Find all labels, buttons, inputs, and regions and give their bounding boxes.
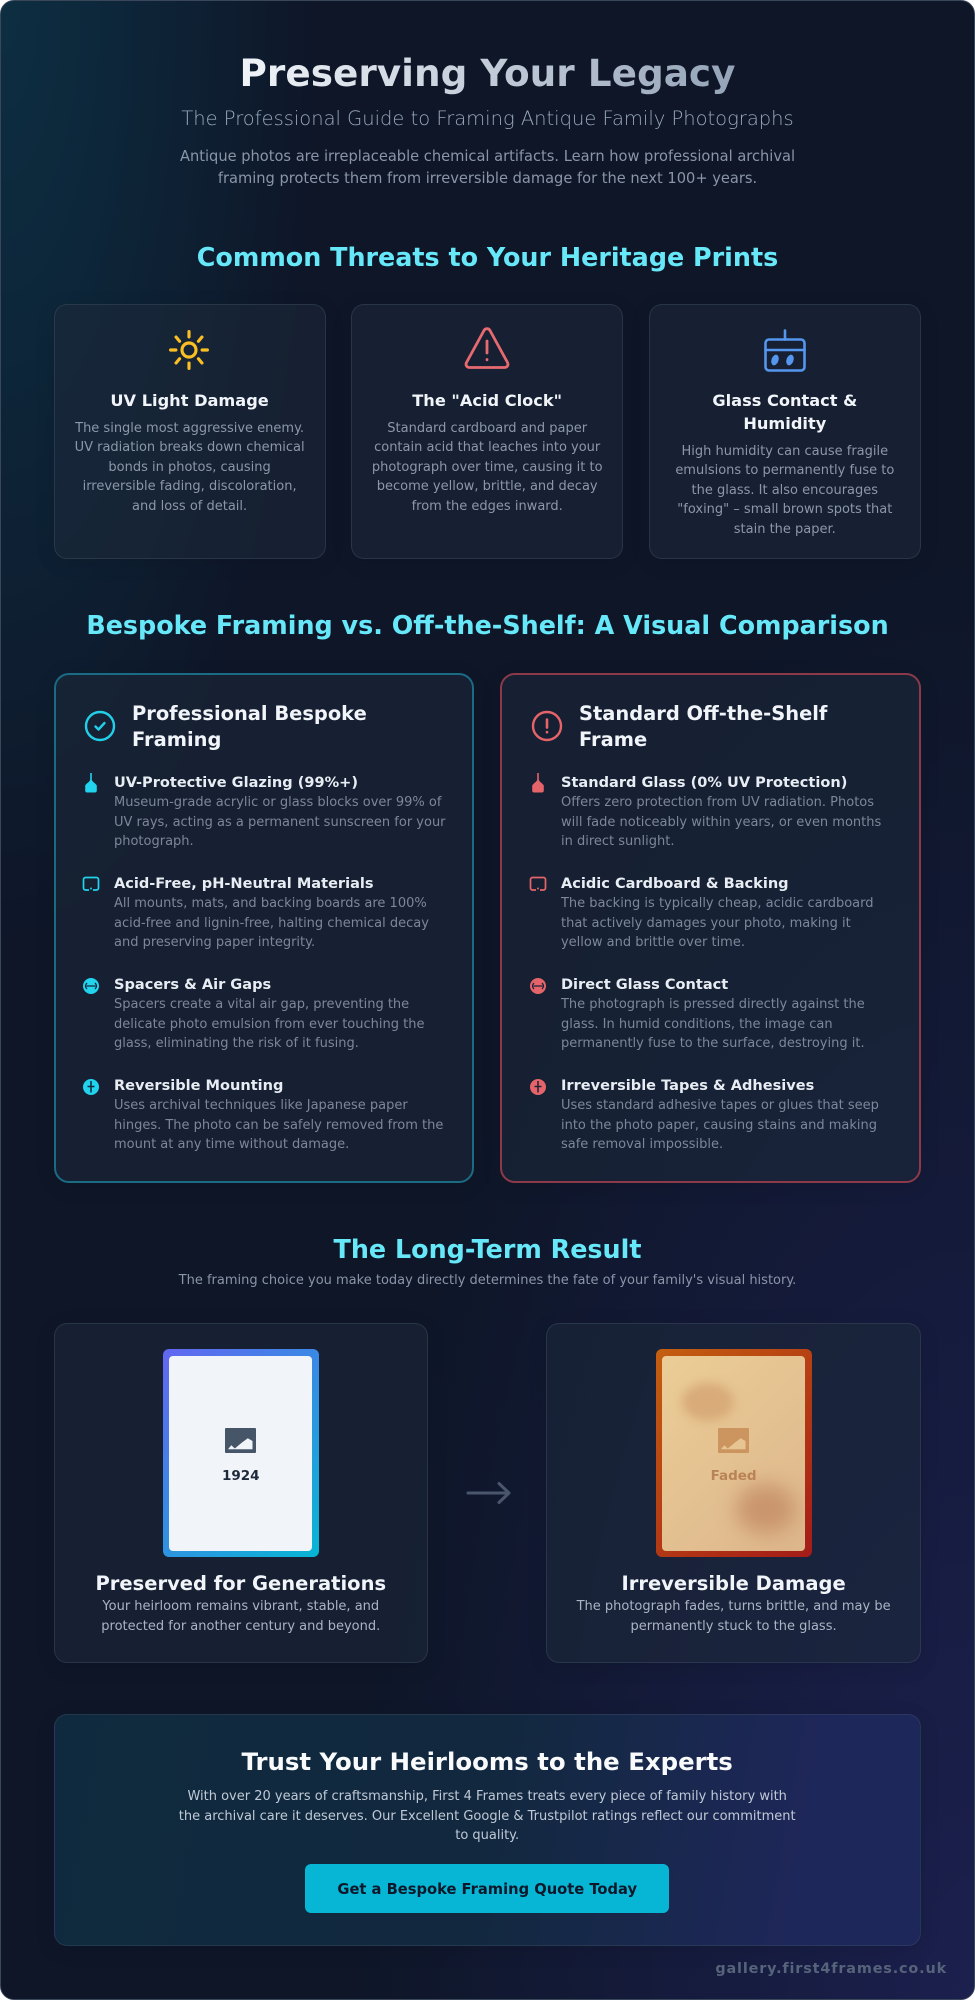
item: standard glass: in direct sunlight. [561, 834, 674, 849]
CTA text: to quality. [455, 1828, 519, 1843]
faded label: Faded [711, 1468, 757, 1484]
CTA heading: Trust Your Heirlooms to the Experts [242, 1747, 733, 1776]
intro text [180, 148, 795, 187]
item: UV glazing: UV rays, acting as a permanent sunscreen for your [114, 814, 446, 830]
subtitle: The Professional Guide to Framing Antique Family Photographs [181, 107, 794, 130]
stain [682, 1382, 734, 1420]
panel heading [132, 702, 367, 751]
CTA text [179, 1789, 796, 1843]
card heading: Humidity [743, 414, 826, 433]
photo [662, 1356, 805, 1550]
heading: comparison: Bespoke Framing vs. Off-the-Shelf: A Visual Comparison [86, 610, 889, 640]
item: acid free: acid-free and lignin-free, halting chemical decay [114, 916, 429, 930]
heading: long-term result: The Long-Term Result [334, 1234, 641, 1264]
result text: protected for another century and beyond. [101, 1618, 380, 1634]
card text: Standard cardboard and paper [387, 420, 587, 436]
card text: bonds in photos, causing [108, 460, 271, 474]
panel: glass contact and humidity [649, 304, 921, 559]
item: direct glass contact [530, 976, 865, 1051]
card text [372, 420, 603, 514]
item: UV glazing: photograph. [114, 834, 194, 849]
item: reversible mounting: Uses archival techniques like Japanese paper [114, 1098, 408, 1113]
item: acidic cardboard: The backing is typically cheap, acidic cardboard [561, 896, 874, 911]
footer url: gallery.first4frames.co.uk [715, 1960, 947, 1976]
card text: from the edges inward. [412, 498, 563, 514]
result heading: Preserved for Generations [96, 1572, 386, 1595]
item: direct glass contact: The photograph is pressed directly against the [561, 997, 865, 1012]
CTA text: With over 20 years of craftsmanship, First 4 Frames treats every piece of family history with [187, 1789, 787, 1804]
icon: spacer [83, 978, 99, 994]
intro text: framing protects them from irreversible damage for the next 100+ years. [218, 170, 757, 187]
stain [736, 1484, 796, 1534]
panel heading: Framing [132, 728, 221, 751]
intro text: Antique photos are irreplaceable chemical artifacts. Learn how professional archival [180, 148, 795, 164]
item: UV glazing: Museum-grade acrylic or glass blocks over 99% of [114, 795, 441, 810]
item: acid free: All mounts, mats, and backing boards are 100% [114, 896, 427, 911]
item: standard glass [532, 773, 881, 849]
icon: check circle [84, 710, 116, 742]
result text [101, 1599, 380, 1634]
item: direct glass contact: permanently fuse to the surface, destroying it. [561, 1036, 865, 1051]
icon: mat board [82, 876, 100, 891]
item text: Standard Glass (0% UV Protection) [561, 774, 847, 791]
panel: damage result [546, 1322, 921, 1662]
icon: sun [169, 330, 209, 370]
icon: plug [83, 1079, 99, 1095]
item: direct glass contact: glass. In humid conditions, the image can [561, 1016, 833, 1032]
item: acidic cardboard: that actively damages your photo, making it [561, 916, 851, 930]
section subtitle: The framing choice you make today directly determines the fate of your family's visual history. [179, 1273, 796, 1288]
item text: Acid-Free, pH-Neutral Materials [114, 875, 374, 892]
icon: image [225, 1428, 256, 1453]
item text: Irreversible Tapes & Adhesives [561, 1077, 814, 1094]
item: UV glazing [85, 773, 446, 849]
card text: contain acid that leaches into your [374, 440, 600, 455]
item: acidic cardboard [530, 875, 874, 950]
illustration: damaged framed photo [656, 1349, 812, 1557]
item: reversible mounting [83, 1077, 443, 1152]
result text [576, 1599, 891, 1634]
icon: warning triangle [464, 327, 510, 369]
icon: alert circle [532, 710, 562, 742]
card text: the glass. It also encourages [692, 482, 878, 498]
title: Preserving Your Legacy [240, 51, 735, 95]
panel: acid clock [351, 304, 623, 559]
heading: common threats: Common Threats to Your Heritage Prints [197, 242, 778, 272]
card text: and loss of detail. [132, 498, 247, 514]
panel: call to action [54, 1714, 921, 1946]
icon: plug [530, 1079, 546, 1095]
item: spacers: Spacers create a vital air gap, preventing the [114, 997, 409, 1012]
panel heading: Professional Bespoke [132, 702, 367, 725]
panel: preserved result [54, 1322, 428, 1662]
item: reversible mounting: hinges. The photo can be safely removed from the [114, 1118, 443, 1132]
item: tapes: into the photo paper, causing stains and making [561, 1118, 877, 1132]
card text: irreversible fading, discoloration, [83, 479, 297, 494]
icon: bottle [85, 773, 97, 792]
item: standard glass: will fade noticeably within years, or even months [561, 814, 881, 830]
year label: 1924 [222, 1468, 260, 1484]
icon: image [718, 1428, 749, 1453]
result text: Your heirloom remains vibrant, stable, and [102, 1599, 379, 1614]
panel: standard off-the-shelf frame [500, 672, 921, 1182]
photo [169, 1356, 312, 1550]
icon: mat board [530, 876, 546, 891]
panel heading: Frame [579, 728, 647, 751]
card heading: UV Light Damage [110, 391, 269, 410]
card text: The single most aggressive enemy. [75, 420, 304, 436]
illustration: preserved framed photo [163, 1349, 319, 1557]
panel heading: Standard Off-the-Shelf [579, 702, 827, 725]
panel: professional bespoke framing [54, 672, 474, 1182]
item text: Spacers & Air Gaps [114, 976, 271, 993]
card text: become yellow, brittle, and decay [377, 479, 598, 494]
button [305, 1864, 669, 1913]
item text: UV-Protective Glazing (99%+) [114, 774, 358, 791]
item: tapes [530, 1077, 879, 1152]
card text [675, 444, 894, 536]
item: acid free: and preserving paper integrity. [114, 935, 315, 950]
item: tapes: safe removal impossible. [561, 1137, 723, 1152]
icon: bottle [532, 773, 544, 792]
item: acidic cardboard: yellow and brittle over time. [561, 935, 745, 950]
card text: photograph over time, causing it to [372, 460, 603, 474]
card heading: The "Acid Clock" [412, 391, 562, 410]
card text: "foxing" – small brown spots that [677, 502, 892, 517]
card text: UV radiation breaks down chemical [75, 440, 305, 455]
card heading [712, 391, 857, 433]
item text: Acidic Cardboard & Backing [561, 875, 789, 892]
result text: The photograph fades, turns brittle, and may be [577, 1599, 891, 1614]
item: spacers: glass, eliminating the risk of it fusing. [114, 1036, 359, 1051]
item: acid free [82, 875, 429, 950]
item: reversible mounting: mount at any time without damage. [114, 1137, 349, 1152]
item: tapes: Uses standard adhesive tapes or glues that seep [561, 1098, 879, 1113]
item: spacers: delicate photo emulsion from ever touching the [114, 1016, 424, 1032]
panel heading [579, 702, 828, 751]
button: Get a Bespoke Framing Quote Today [337, 1881, 637, 1898]
icon: humidity box [764, 329, 806, 372]
item: standard glass: Offers zero protection from UV radiation. Photos [561, 795, 874, 810]
card text: emulsions to permanently fuse to [675, 463, 894, 478]
card text: High humidity can cause fragile [681, 444, 888, 458]
result text: permanently stuck to the glass. [631, 1618, 837, 1634]
CTA text: the archival care it deserves. Our Excellent Google & Trustpilot ratings reflect our commitment [179, 1808, 796, 1824]
arrow [466, 1482, 510, 1504]
card text: stain the paper. [734, 522, 836, 536]
panel: UV light damage [54, 304, 326, 559]
item text: Reversible Mounting [114, 1077, 283, 1094]
item: spacers [83, 976, 424, 1051]
result heading: Irreversible Damage [621, 1572, 846, 1595]
item text: Direct Glass Contact [561, 976, 728, 993]
icon: spacer [530, 978, 546, 994]
card text [75, 420, 305, 514]
card heading: Glass Contact & [712, 391, 857, 410]
